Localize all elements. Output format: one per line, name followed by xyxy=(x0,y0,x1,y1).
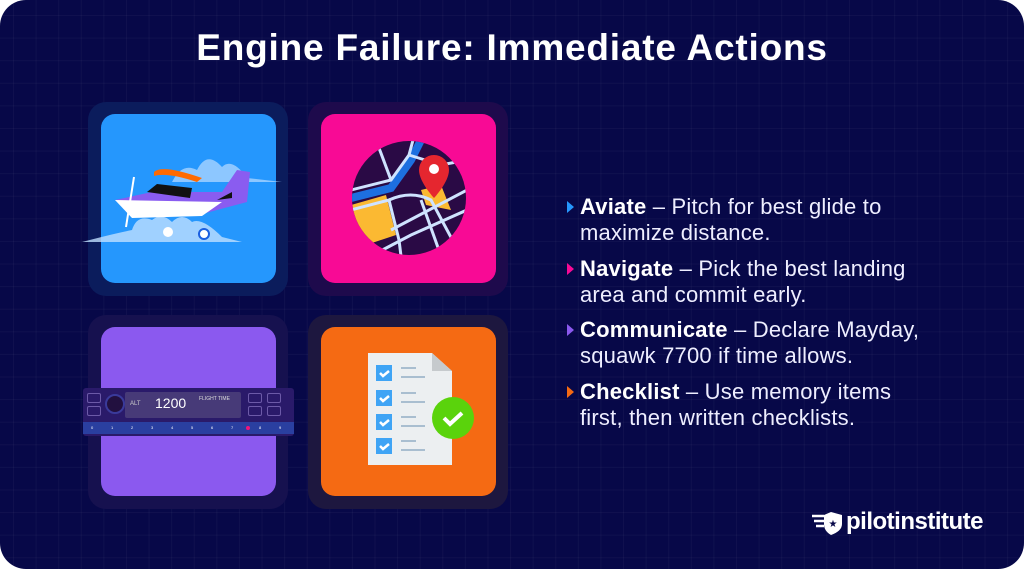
logo: pilotinstitute: ★ xyxy=(829,519,838,530)
logo: pilotinstitute: pilotinstitute xyxy=(846,508,983,535)
icon: transponder: 6 xyxy=(211,425,213,430)
icon: transponder: 1200 xyxy=(155,395,186,411)
icon: transponder: 1 xyxy=(111,425,113,430)
item: communicate xyxy=(567,317,919,368)
icon: transponder: 2 xyxy=(131,425,133,430)
icon: transponder: 8 xyxy=(259,425,261,430)
icon: transponder: 9 xyxy=(279,425,281,430)
panel: navigate xyxy=(308,102,508,296)
icon: transponder: 4 xyxy=(171,425,173,430)
item: communicate: Communicate – Declare Mayday, xyxy=(580,317,919,342)
item: navigate: Navigate – Pick the best landing xyxy=(580,256,906,281)
item: communicate: squawk 7700 if time allows. xyxy=(580,343,853,368)
icon: airplane xyxy=(82,159,282,242)
icon: transponder xyxy=(83,388,294,436)
panel: aviate xyxy=(82,102,288,296)
icon: checklist document xyxy=(368,353,474,465)
icon: transponder: ALT xyxy=(130,401,141,407)
item: aviate: Aviate – Pitch for best glide to xyxy=(580,194,882,219)
title: Engine Failure: Immediate Actions xyxy=(196,27,828,68)
icon: transponder: 5 xyxy=(191,425,193,430)
item: checklist: Checklist – Use memory items xyxy=(580,379,891,404)
icon: transponder: 0 xyxy=(91,425,93,430)
panel: checklist xyxy=(308,315,508,509)
panel: communicate xyxy=(83,315,294,509)
icon: map with pin xyxy=(352,141,466,255)
icon: transponder: 7 xyxy=(231,425,233,430)
icon: transponder: FLIGHT TIME xyxy=(199,396,230,402)
item: checklist: first, then written checklists. xyxy=(580,405,855,430)
text block: actions list xyxy=(567,194,919,430)
item: navigate xyxy=(567,256,906,307)
item: aviate xyxy=(567,194,882,245)
item: checklist xyxy=(567,379,891,430)
icon: transponder: 3 xyxy=(151,425,153,430)
item: aviate: maximize distance. xyxy=(580,220,771,245)
item: navigate: area and commit early. xyxy=(580,282,807,307)
